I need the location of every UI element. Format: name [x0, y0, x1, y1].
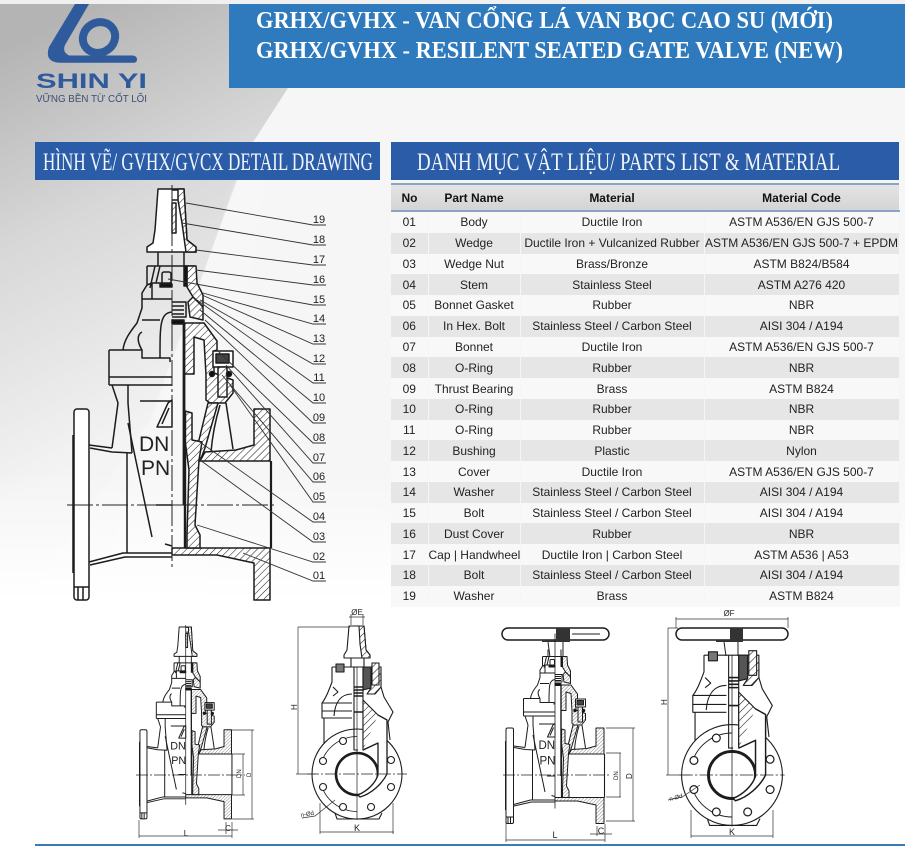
table header: Plastic: [594, 444, 630, 458]
heading: parts list: [391, 142, 899, 180]
table header: In Hex. Bolt: [443, 319, 505, 333]
dimension labels: ØE: [351, 608, 363, 617]
drawing: front view handwheel type: PN: [540, 756, 555, 768]
table header: 18: [403, 568, 416, 582]
title line Vietnamese: GRHX/GVHX - VAN CỔNG LÁ VAN BỌC CAO SU (MỚI): [256, 7, 833, 34]
table header: Brass/Bronze: [576, 257, 648, 271]
table header: Stainless Steel: [572, 278, 652, 292]
table header: Thrust Bearing: [435, 382, 513, 396]
table header: Wedge Nut: [444, 257, 504, 271]
drawing: front view handwheel type: [502, 628, 635, 842]
part number labels: 07: [313, 452, 325, 464]
part number labels: 16: [313, 274, 325, 286]
table header: ASTM B824/B584: [753, 257, 850, 271]
table header: ASTM A536/EN GJS 500-7: [729, 465, 874, 479]
part number labels: 02: [313, 551, 325, 563]
table header: Stainless Steel / Carbon Steel: [532, 485, 692, 499]
table header: 07: [403, 340, 416, 354]
table header: NBR: [789, 402, 814, 416]
handwheel: [502, 628, 609, 657]
table header: 14: [403, 485, 416, 499]
table header: Stem: [460, 278, 488, 292]
part number labels: 15: [313, 294, 325, 306]
dimension labels: L: [184, 829, 189, 838]
dimension labels: C: [225, 824, 231, 833]
heading: detail drawing: HÌNH VẼ/ GVHX/GVCX DETAIL DRAWING: [43, 148, 373, 176]
part number labels: 04: [313, 511, 325, 523]
table header: Rubber: [592, 423, 632, 437]
table header: NBR: [789, 527, 814, 541]
table header: 15: [403, 506, 416, 520]
table header: Bolt: [464, 506, 484, 520]
table header: Rubber: [592, 298, 632, 312]
table header: Ductile Iron + Vulcanized Rubber: [524, 236, 700, 250]
title line English: GRHX/GVHX - RESILENT SEATED GATE VALVE (NEW): [256, 38, 843, 64]
table header: Rubber: [592, 361, 632, 375]
part number labels: [313, 214, 325, 582]
dimension labels: DN: [614, 771, 620, 780]
part number labels: 06: [313, 471, 325, 483]
table header: Cap | Handwheel: [428, 548, 520, 562]
table header: Bonnet Gasket: [434, 298, 514, 312]
table header: Nylon: [786, 444, 817, 458]
table header: AISI 304 / A194: [760, 568, 843, 582]
table header: 11: [403, 423, 415, 437]
dimension labels: D: [625, 773, 634, 779]
table header: Ductile Iron: [582, 340, 642, 354]
table header: Stainless Steel / Carbon Steel: [532, 319, 692, 333]
leader lines: [168, 203, 326, 581]
handwheel: [676, 628, 788, 656]
table header: AISI 304 / A194: [760, 485, 843, 499]
valve section: [67, 185, 276, 600]
part number labels: 18: [313, 234, 325, 246]
table header: Ductile Iron: [582, 465, 642, 479]
dimension labels: H: [290, 704, 299, 710]
table header: 13: [403, 465, 416, 479]
table header: Stainless Steel / Carbon Steel: [532, 506, 692, 520]
table header: ASTM A536/EN GJS 500-7 + EPDM: [705, 236, 898, 250]
table header: 09: [403, 382, 416, 396]
dimension labels: H: [660, 699, 669, 705]
table header: 16: [403, 527, 416, 541]
table header: NBR: [789, 423, 814, 437]
table header: AISI 304 / A194: [760, 319, 843, 333]
dimension labels: K: [729, 827, 735, 837]
dimension labels: DN: [237, 769, 243, 778]
part number labels: 17: [313, 254, 325, 266]
table header: ASTM A276 420: [758, 278, 845, 292]
valve section: PN: [141, 457, 170, 480]
part number labels: 10: [313, 392, 325, 404]
table header: [391, 185, 899, 603]
dimension labels: n-Ød: [669, 794, 683, 803]
table header: Ductile Iron: [582, 215, 642, 229]
table header: ASTM A536 | A53: [754, 548, 849, 562]
table header: Bolt: [464, 568, 484, 582]
title panel: [229, 4, 905, 88]
logo: Shin Yi: [36, 4, 147, 105]
table header: O-Ring: [455, 423, 493, 437]
part number labels: 12: [313, 353, 325, 365]
table header: O-Ring: [455, 402, 493, 416]
table header: 03: [403, 257, 416, 271]
table header: O-Ring: [455, 361, 493, 375]
table header: 01: [403, 215, 416, 229]
table header: Brass: [597, 589, 627, 603]
part number labels: 14: [313, 313, 325, 325]
logo name: SHIN YI: [36, 70, 147, 93]
table header: ASTM B824: [769, 382, 834, 396]
dimension labels: [290, 608, 363, 833]
table header: Rubber: [592, 527, 632, 541]
table header: No: [402, 190, 418, 204]
table header: Dust Cover: [444, 527, 504, 541]
part number labels: 05: [313, 491, 325, 503]
table header: AISI 304 / A194: [760, 506, 843, 520]
table header: 06: [403, 319, 416, 333]
dimensions: [296, 614, 394, 834]
part number labels: 13: [313, 333, 325, 345]
table header: ASTM A536/EN GJS 500-7: [729, 215, 874, 229]
dimensions: [506, 728, 635, 842]
table header: Washer: [454, 485, 494, 499]
table header: Bushing: [452, 444, 496, 458]
part number labels: 08: [313, 432, 325, 444]
table header: 10: [403, 402, 416, 416]
part number labels: 19: [313, 214, 325, 226]
table header: Material Code: [762, 190, 841, 204]
table header: Stainless Steel / Carbon Steel: [532, 568, 692, 582]
dimension labels: n-Ød: [300, 811, 314, 819]
table header: Part Name: [444, 190, 504, 204]
table header: Brass: [597, 382, 627, 396]
table header: 19: [403, 589, 416, 603]
table header: Cover: [458, 465, 490, 479]
drawing: side view cap type: [290, 608, 407, 834]
table header: Body: [460, 215, 488, 229]
table header: 05: [403, 298, 416, 312]
dimension labels: ØF: [723, 609, 735, 618]
table header: 12: [403, 444, 416, 458]
table header: Bonnet: [455, 340, 493, 354]
dimension labels: D: [247, 772, 253, 777]
dimensions: [139, 730, 254, 838]
drawing: front view cap type: [136, 625, 254, 838]
drawing: front view handwheel type: DN: [538, 740, 555, 752]
part number labels: 11: [313, 372, 325, 384]
logo mark: [48, 4, 137, 63]
table header: 02: [403, 236, 416, 250]
table header: Material: [589, 190, 635, 204]
dimension labels: C: [598, 826, 605, 836]
dimension labels: K: [354, 823, 360, 833]
part number labels: 09: [313, 412, 325, 424]
table header: 17: [403, 548, 416, 562]
table header: 04: [403, 278, 416, 292]
drawing: front view cap type: DN: [170, 740, 186, 752]
bottom rule: [35, 844, 905, 846]
table header: 08: [403, 361, 416, 375]
table header: ASTM A536/EN GJS 500-7: [729, 340, 874, 354]
dimension labels: [552, 771, 634, 840]
table header: Ductile Iron | Carbon Steel: [542, 548, 682, 562]
heading: detail drawing: [35, 142, 380, 180]
dimension labels: [184, 769, 253, 838]
dimensions: [666, 617, 788, 838]
drawing: side view handwheel type: [660, 609, 788, 838]
parts table: [391, 183, 900, 607]
table header: NBR: [789, 361, 814, 375]
table header: NBR: [789, 298, 814, 312]
part number labels: 03: [313, 531, 325, 543]
part number labels: 01: [313, 570, 325, 582]
valve section: DN: [139, 433, 169, 456]
logo tagline: VỮNG BỀN TỪ CỐT LÕI: [36, 91, 147, 105]
table header: Rubber: [592, 402, 632, 416]
drawing: front view cap type: PN: [171, 755, 186, 767]
table header: Wedge: [455, 236, 493, 250]
dimension labels: L: [552, 830, 558, 840]
main detail drawing: [67, 185, 326, 600]
dimension labels: [660, 609, 735, 837]
table header: Washer: [454, 589, 494, 603]
table header: ASTM B824: [769, 589, 834, 603]
